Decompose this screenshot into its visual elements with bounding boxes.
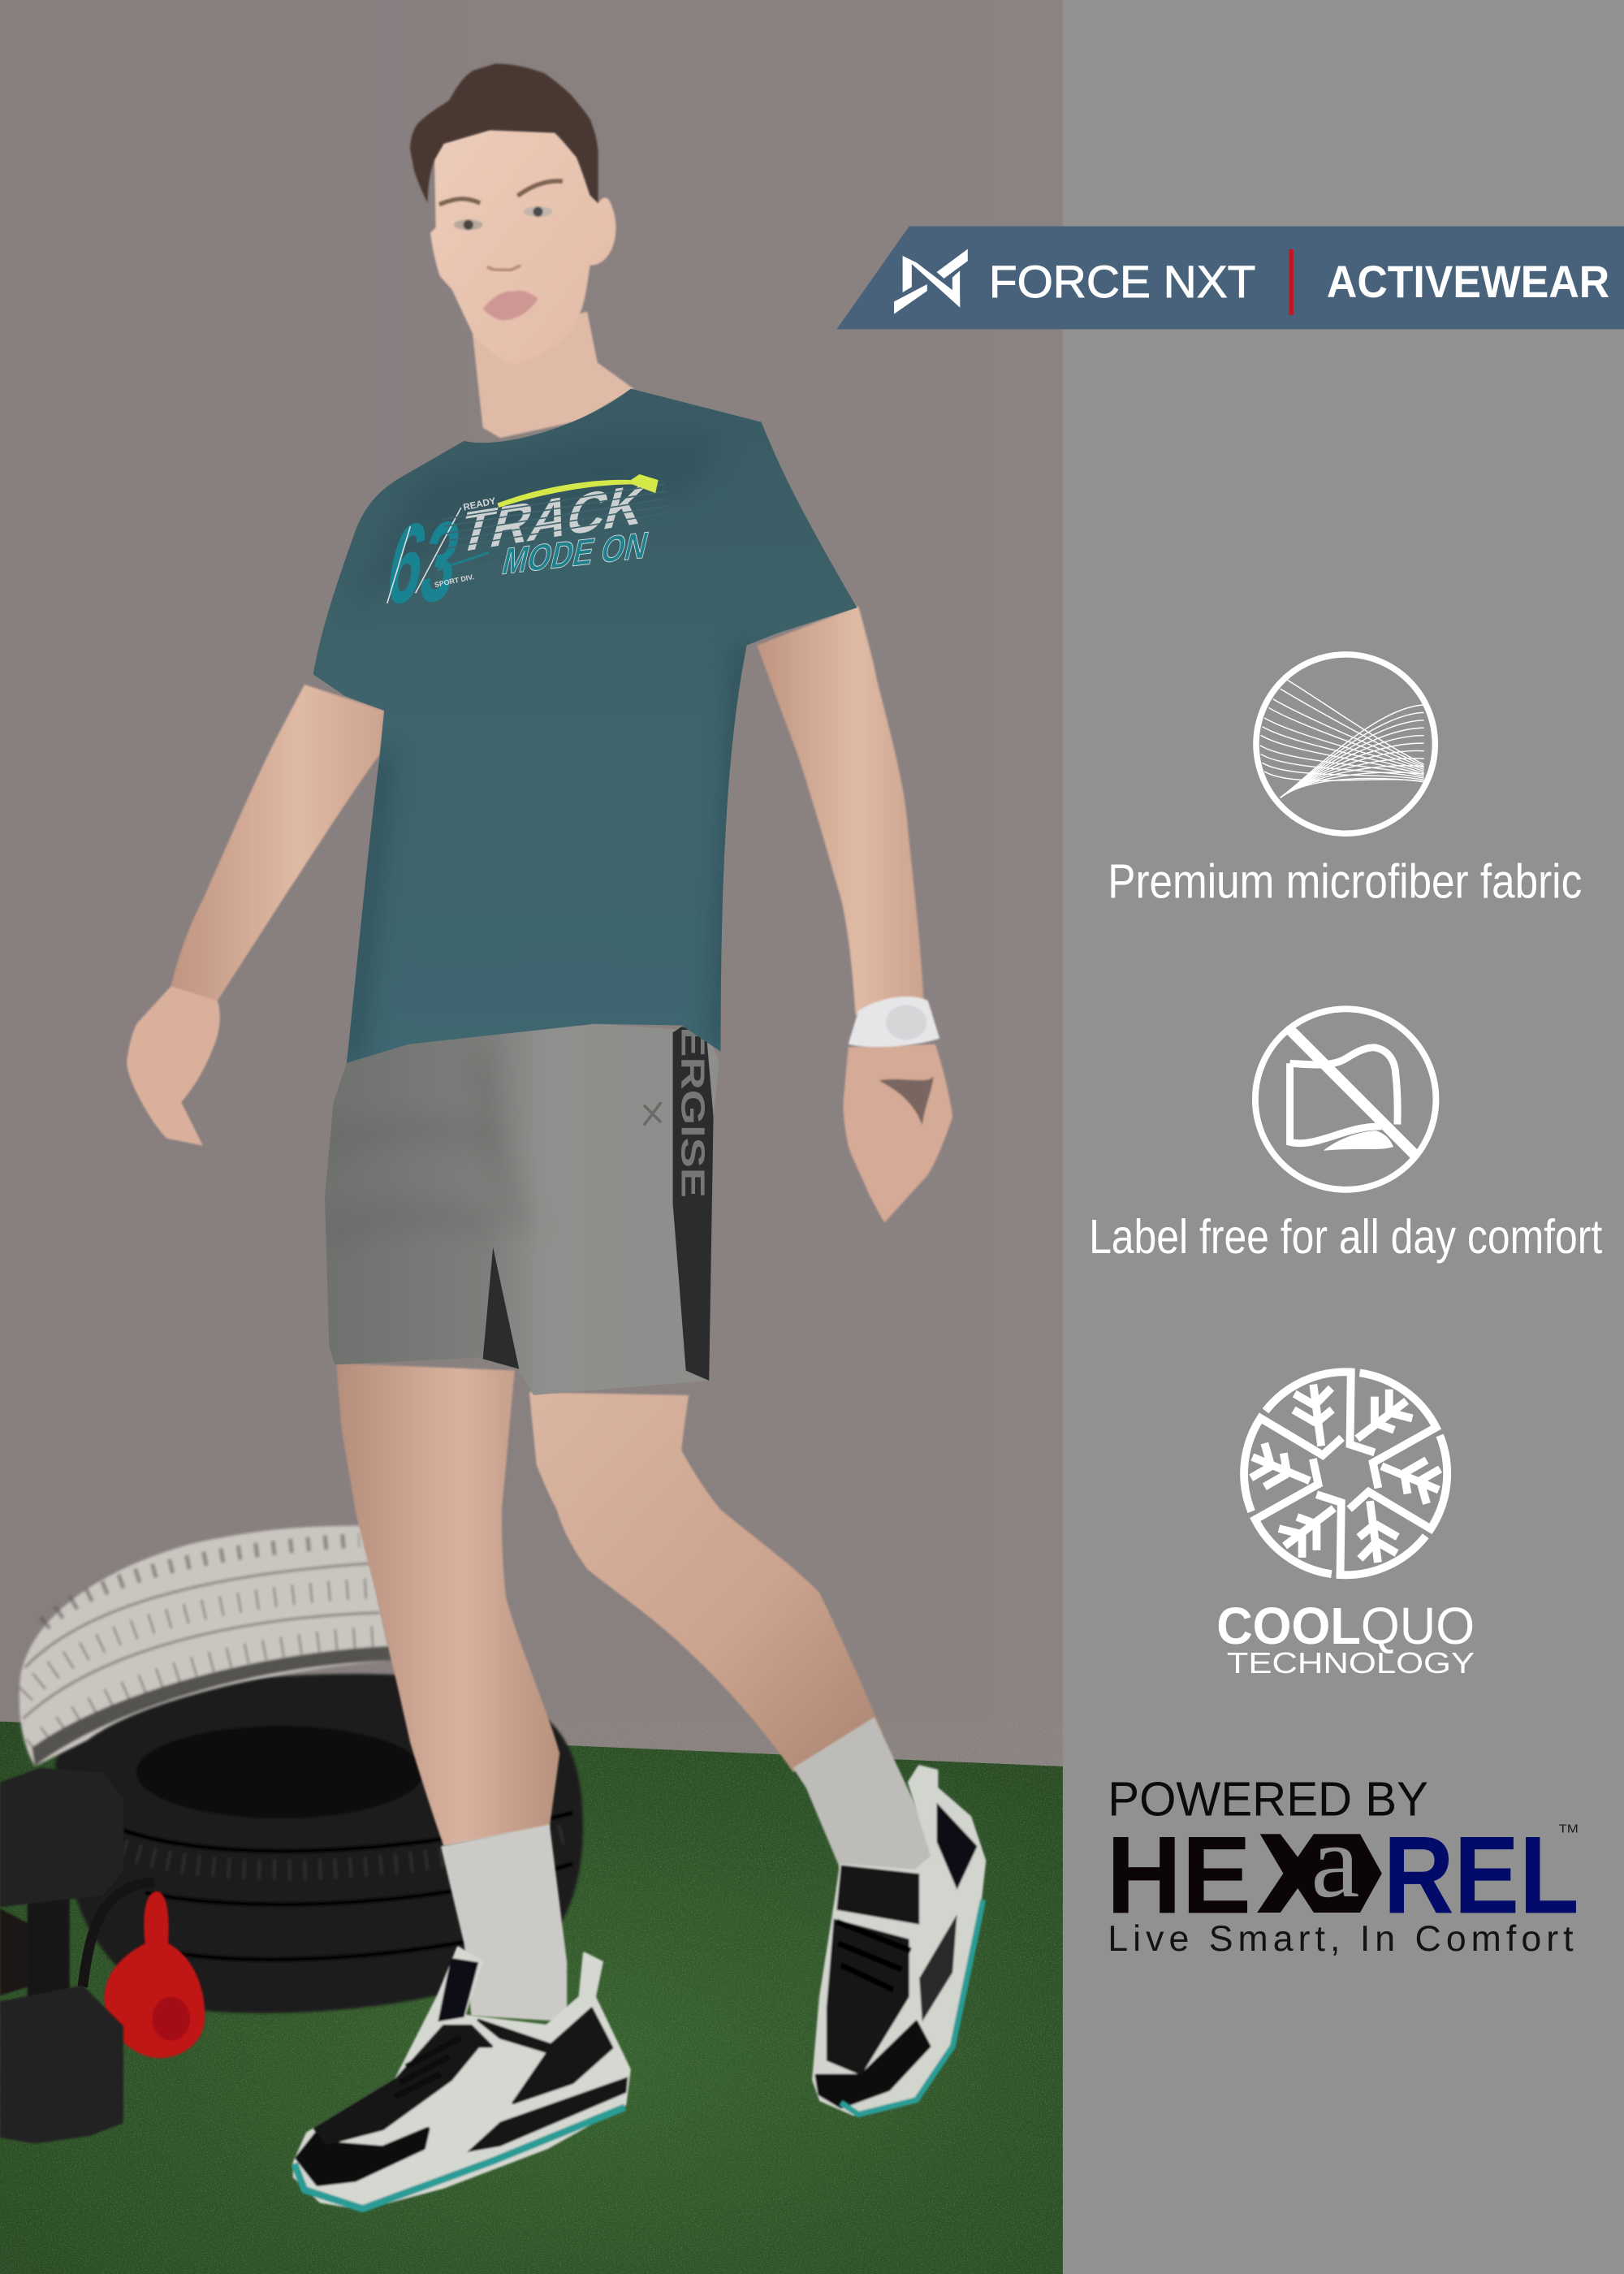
stripe lettering: ERGISE	[674, 1027, 711, 1198]
graphic: slash lines	[387, 508, 461, 603]
coolquo wordmark: COOLQUO	[1216, 1597, 1475, 1655]
gym props	[0, 1526, 583, 2143]
soft fabric folds	[476, 1123, 496, 1143]
brand ribbon	[836, 227, 1624, 329]
eyes	[454, 206, 552, 230]
serif a: a	[1311, 1803, 1359, 1919]
icon: snowflake roundel	[1218, 1353, 1474, 1593]
technology wordmark: TECHNOLOGY	[1227, 1647, 1475, 1680]
nose	[487, 266, 520, 270]
right info panel	[1063, 0, 1624, 2274]
inseam dark panel	[483, 1247, 519, 1369]
hand tattoo	[879, 1076, 934, 1126]
category: ACTIVEWEAR	[1327, 257, 1609, 307]
left leg	[336, 1364, 559, 1846]
lips	[483, 291, 538, 321]
kettlebell handle	[83, 1883, 153, 1987]
brand logo mark	[894, 249, 968, 314]
feature: label free	[1089, 1009, 1602, 1264]
feature: microfiber fabric	[1108, 655, 1582, 908]
HE letters: HE	[1106, 1813, 1251, 1936]
trademark: TM	[1559, 1822, 1579, 1836]
graphic: READY: READY	[462, 495, 497, 513]
left arm (viewer side)	[127, 685, 384, 1146]
model	[127, 63, 985, 2209]
white wrist watch	[849, 996, 939, 1047]
t-shirt	[313, 389, 857, 1063]
grass floor	[0, 1722, 1063, 2274]
icon: woven fibre circle	[1256, 655, 1435, 833]
right arm (viewer side)	[757, 606, 952, 1222]
shorts	[322, 1024, 719, 1395]
left photo backdrop wall	[0, 0, 1063, 1783]
graphic: SPORT DIV: SPORT DIV.	[434, 573, 475, 589]
hexarel lockup	[1106, 1774, 1579, 1959]
left shoe	[294, 1948, 629, 2209]
red kettlebell	[105, 1891, 205, 2058]
powered by: POWERED BY	[1108, 1774, 1428, 1827]
dumbbell	[0, 1768, 123, 2143]
neck	[473, 312, 633, 438]
feature: coolquo technology	[1216, 1353, 1475, 1680]
white painted tyre	[19, 1526, 391, 1766]
head	[410, 63, 616, 364]
socks	[441, 1717, 937, 2021]
REL letters: REL	[1384, 1813, 1579, 1936]
grass texture	[0, 1722, 1063, 2274]
shorts logo	[644, 1102, 661, 1126]
brand name: FORCE NXT	[989, 257, 1255, 307]
face	[430, 130, 616, 364]
red divider	[1289, 249, 1294, 315]
graphic: 63 numeral: 63	[378, 498, 469, 628]
eyebrows	[439, 181, 563, 205]
right shoe	[814, 1766, 984, 2115]
graphic: MODE ON: MODE ON	[499, 524, 652, 582]
graphic: TRACK stripes	[443, 484, 669, 548]
hexagon X	[1257, 1834, 1382, 1913]
graphic: TRACK: TRACK	[451, 471, 654, 565]
right leg	[529, 1392, 883, 1772]
icon: crossed-out label	[1255, 1009, 1436, 1190]
fabric shading	[348, 435, 747, 1063]
hair	[410, 63, 598, 203]
tagline: Live Smart, In Comfort	[1108, 1919, 1574, 1959]
graphic: accent bar	[438, 552, 489, 570]
side stripe	[673, 1027, 714, 1381]
black tyre	[55, 1674, 583, 2013]
graphic: neon swoosh	[497, 474, 659, 508]
